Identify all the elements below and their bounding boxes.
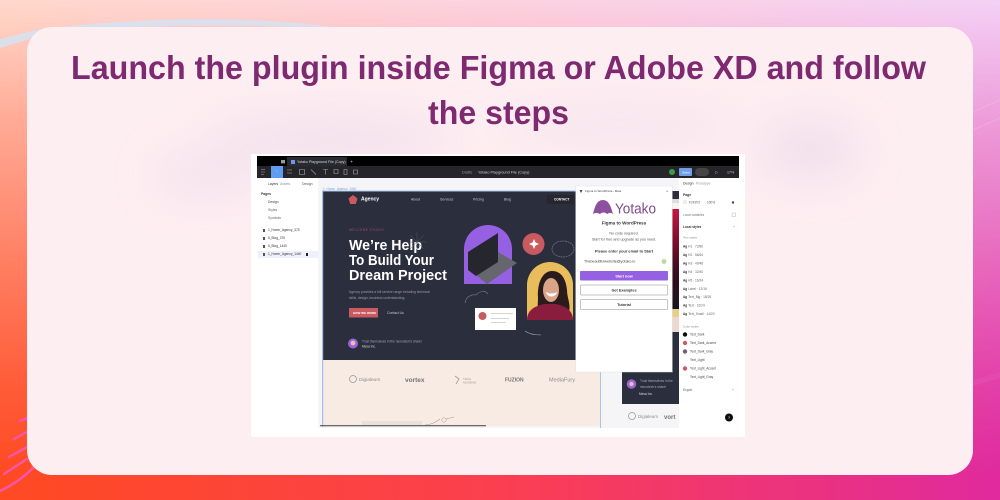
right design panel: Text_Light_Accent (690, 366, 716, 370)
left layers panel: Styles (268, 208, 278, 212)
left layers panel: Assets (280, 182, 290, 186)
right design panel: Design (683, 182, 694, 186)
right design panel: Ag H2 · 56/64 (683, 253, 703, 257)
figma toolbar: Drafts (462, 170, 472, 174)
left layers panel: 1_Home_Agency_375 (268, 228, 300, 232)
right design panel: Text_Dark_Accent (690, 341, 716, 345)
second frame behind plugin: Digialeum (638, 414, 658, 419)
website hero: dark agency design (322, 190, 576, 360)
button: tutorial (580, 300, 668, 310)
canvas frame label: 1_Home_Agency_1440 (323, 187, 357, 191)
title (71, 49, 926, 131)
hero art: floating card (475, 308, 516, 330)
second frame behind plugin: vort (664, 415, 675, 421)
website logos strip: vortex (405, 377, 425, 384)
website hero: dark agency design: skills, design, business understanding. (349, 296, 405, 300)
right design panel: Ag Text · 16/24 (683, 304, 705, 308)
right design panel: Ag Text_Big · 18/28 (683, 295, 711, 299)
plugin window: Figma to WordPress: Figma to WordPress - Beta (585, 189, 621, 193)
website logos strip: MONDAE (463, 380, 476, 384)
hero heading: We’re Help (349, 238, 422, 254)
right design panel: Text_Light (690, 358, 705, 362)
hero art: portrait (527, 262, 573, 320)
right design panel: Ag Label · 12/16 (683, 287, 707, 291)
hero heading (349, 238, 447, 284)
button: get examples (580, 285, 668, 295)
right design panel: Local variables (683, 213, 705, 217)
left layers panel: 1_Home_Agency_1440 (268, 252, 302, 256)
website hero: dark agency design: HOW WE WORK (353, 311, 377, 315)
help button: ? (728, 415, 731, 420)
figma tab bar: Yotako Playground File (Copy) (297, 160, 346, 164)
right design panel: Ag H4 · 32/40 (683, 270, 703, 274)
plugin window: Figma to WordPress (576, 186, 672, 372)
right design panel: Export (683, 388, 692, 392)
button: tutorial: Tutorial (617, 303, 631, 307)
website hero: dark agency design: Trust themselves in the neurotech's share! (362, 340, 422, 344)
hero art: laptop arch (464, 225, 512, 284)
right design panel: + (732, 388, 734, 392)
plugin logo: Yotako (593, 200, 656, 218)
hero heading: Dream Project (349, 268, 447, 284)
left layers panel: Layers (268, 182, 278, 186)
right design panel: Ag H5 · 16/24 (683, 278, 703, 282)
right design panel: F2F2F2 (689, 200, 700, 204)
figma toolbar: 17% (727, 170, 735, 174)
figma tab bar: + (350, 160, 353, 166)
plugin window: Figma to WordPress: No code required. (609, 232, 639, 236)
right design panel (679, 178, 739, 428)
website hero: dark agency design: WELCOME STUDIO (349, 228, 384, 232)
website logos strip: TECH (463, 377, 471, 381)
website hero: dark agency design: Pricing (473, 198, 484, 202)
left layers panel: Symbols (268, 216, 281, 220)
right design panel: Ag H1 · 72/80 (683, 244, 703, 248)
right design panel: Color styles (683, 324, 699, 328)
figma toolbar (257, 166, 739, 178)
figma toolbar: ▷ (715, 170, 719, 174)
right design panel: Text_Light_Gray (690, 375, 714, 379)
button: start now (580, 271, 668, 280)
plugin window: Figma to WordPress: Figma to WordPress (602, 220, 647, 226)
hero heading: To Build Your (349, 253, 434, 269)
right design panel: Ag H3 · 40/48 (683, 262, 703, 266)
hero art: red badge (522, 233, 544, 255)
website hero: dark agency design: Agency (361, 196, 379, 202)
left layers panel: 6_Blog_375 (268, 236, 285, 240)
right design panel: Page (683, 193, 691, 197)
right design panel: Text_Dark (690, 332, 705, 336)
plugin window: Figma to WordPress: × (666, 188, 669, 194)
screenshot: Figma editor (251, 154, 745, 437)
left layers panel: Pages (261, 192, 271, 196)
title: Launch the plugin inside Figma or Adobe XD and follow (71, 49, 926, 86)
website logos strip: FUZION (505, 378, 524, 384)
figma tab bar (257, 156, 739, 166)
right design panel: 100% (707, 200, 715, 204)
figma toolbar: Share (682, 170, 690, 174)
right design panel: Ag Text_Small · 14/20 (683, 312, 715, 316)
website hero: dark agency design: Contact Us (387, 311, 404, 315)
figma toolbar: Yotako Playground File (Copy) (478, 170, 530, 174)
plugin window: Figma to WordPress: Thebeautifulwebsite@yotako.io (584, 260, 635, 264)
second frame behind plugin: neurotech's share! (640, 385, 666, 389)
plugin window: Figma to WordPress: Please enter your email to Start (595, 248, 654, 254)
right design panel: Local styles (683, 225, 701, 229)
website logos strip (320, 191, 601, 428)
website hero: dark agency design: Blog (504, 198, 511, 202)
title: the steps (428, 94, 569, 131)
plugin logo: Yotako: Yotako (615, 202, 656, 218)
website hero: dark agency design: About (411, 198, 420, 202)
help button (725, 414, 733, 422)
website hero: dark agency design: Mesa Inc. (362, 344, 376, 348)
left layers panel (257, 178, 318, 428)
right design panel: Text_Dark_Gray (690, 350, 713, 354)
right design panel: Prototype (696, 182, 711, 186)
second frame behind plugin: Mesa Inc. (639, 392, 653, 396)
right design panel: + (733, 225, 735, 229)
button: start now: Start now (615, 274, 633, 278)
plugin window: Figma to WordPress: Start for free and upgrade as you need. (592, 238, 656, 242)
right design panel: Text styles (683, 236, 698, 240)
left layers panel: Design (302, 182, 313, 186)
website hero: dark agency design: Services (440, 198, 454, 202)
second frame behind plugin: Trust themselves in the (640, 379, 673, 383)
button: get examples: Get Examples (611, 288, 637, 292)
left layers panel: 6_Blog_1440 (268, 244, 287, 248)
website logos strip: Digialeum (359, 377, 380, 383)
second frame behind plugin (622, 191, 679, 428)
website hero: dark agency design: Agency provides a full service range including technical (349, 290, 430, 294)
website logos strip: MediaFury (549, 378, 575, 384)
left layers panel: Design (268, 200, 279, 204)
website hero: dark agency design: CONTACT (554, 198, 569, 202)
